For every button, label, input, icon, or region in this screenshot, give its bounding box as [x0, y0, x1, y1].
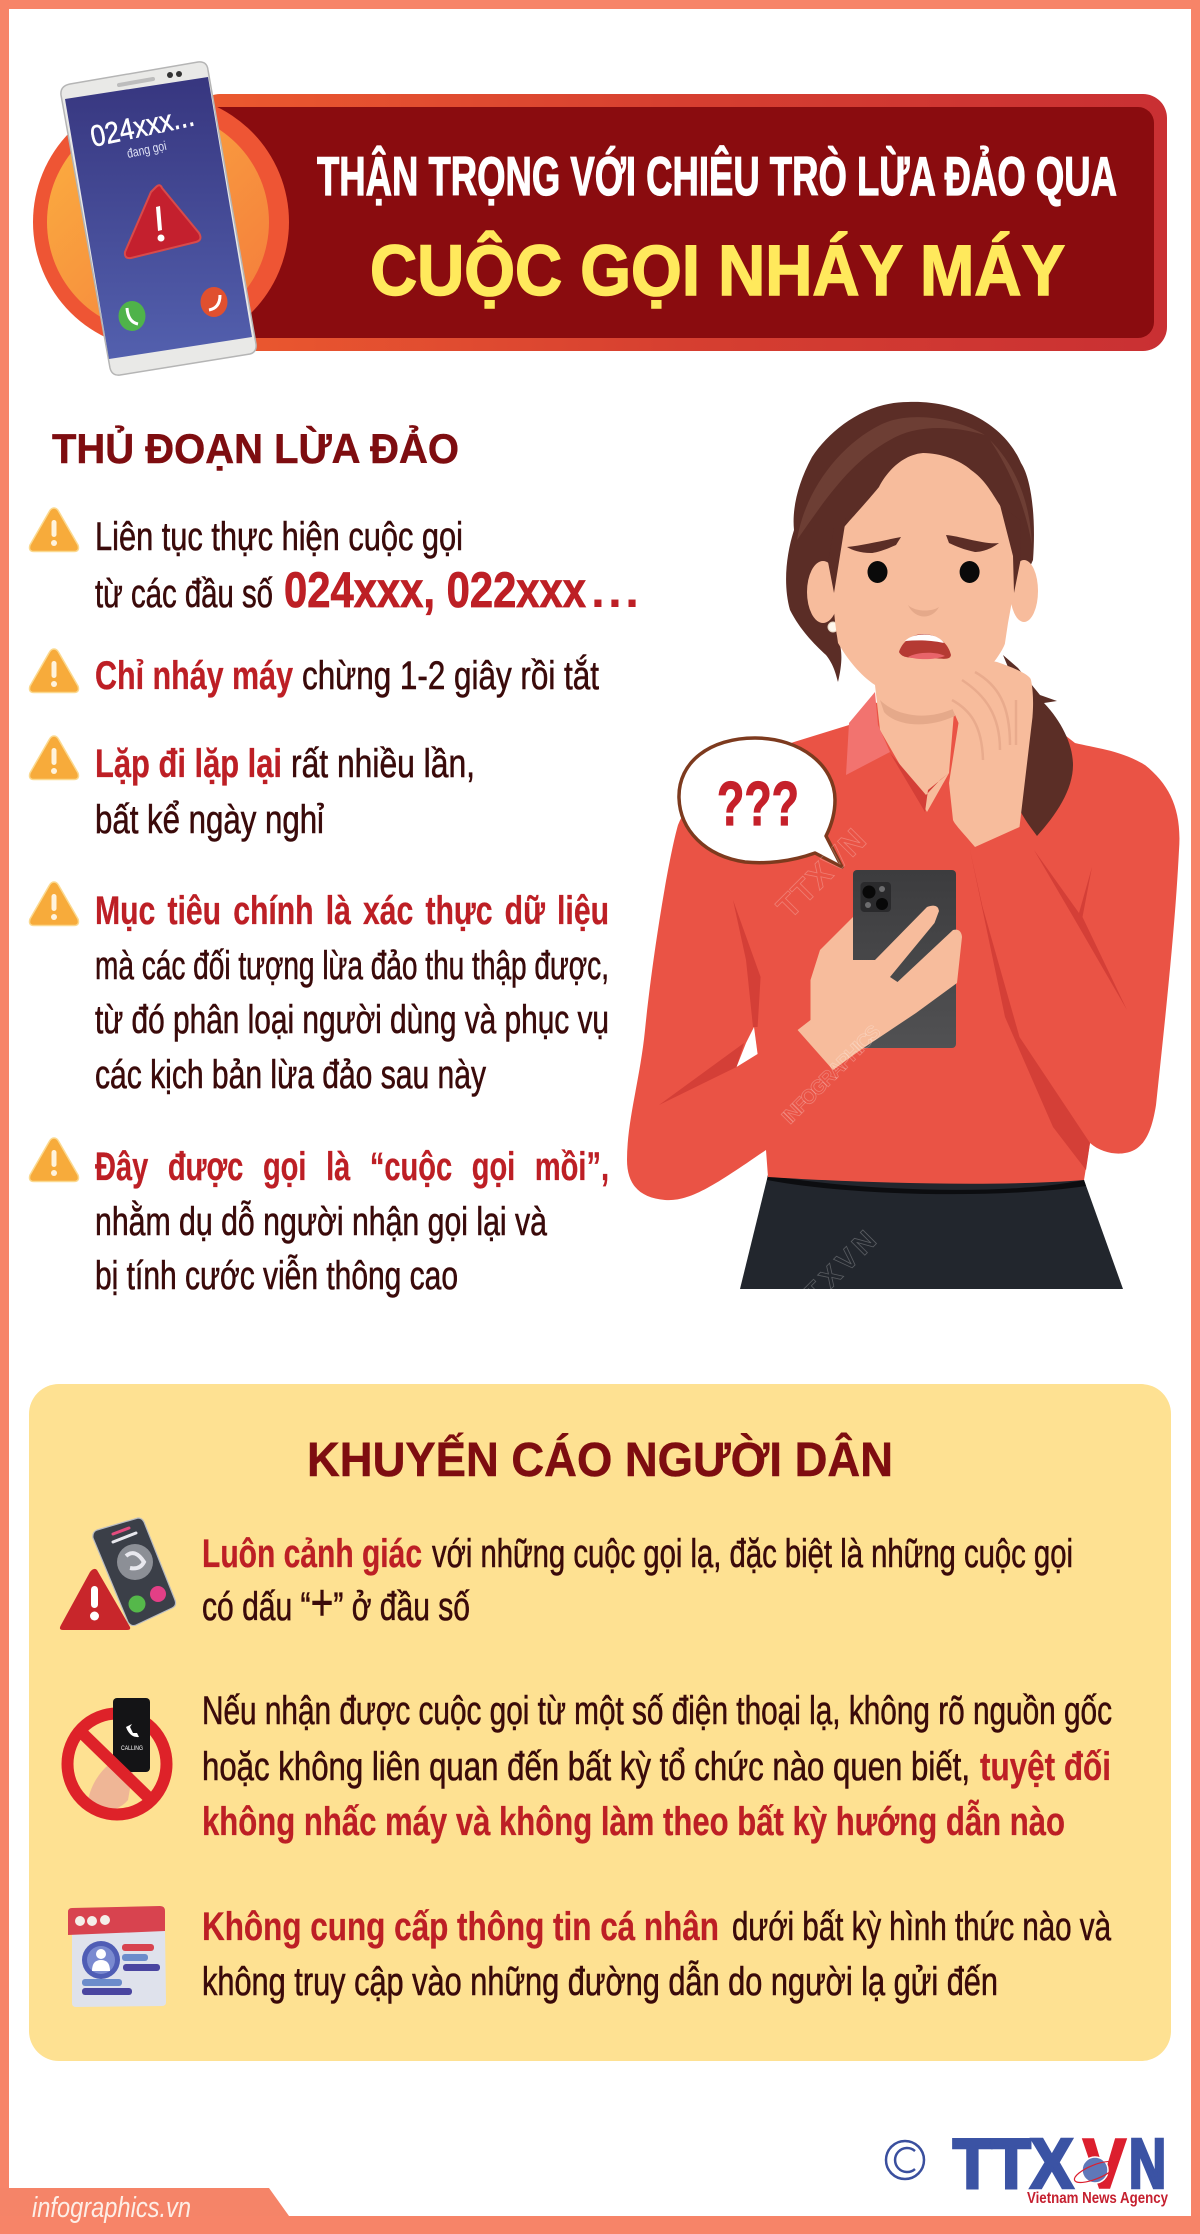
icon: warning	[30, 649, 78, 692]
sideburns	[828, 505, 1021, 593]
icon: phone and warning	[60, 1518, 176, 1630]
title banner	[33, 94, 1167, 351]
text: nhằm dụ dỗ người nhận gọi lại và	[95, 1199, 548, 1244]
wordmark: Vietnam News Agency	[1027, 2190, 1168, 2207]
shirt	[627, 700, 1179, 1200]
face	[833, 453, 1018, 705]
text: Đây được gọi là “cuộc gọi mồi”,	[95, 1145, 609, 1189]
watermarks: INFOGRAPHICS	[778, 1021, 885, 1129]
illustration: worried woman holding phone	[627, 402, 1179, 1324]
icon: answer button	[118, 301, 146, 331]
watermarks: TTXVN	[769, 822, 873, 925]
icon: personal info window	[68, 1906, 166, 2007]
text: Chỉ nháy máy	[95, 654, 294, 698]
item 2	[30, 649, 599, 698]
icon: warning	[30, 1138, 78, 1182]
text: Luôn cảnh giác	[202, 1532, 422, 1576]
item 1	[30, 508, 639, 618]
recommendation 2	[68, 1689, 1112, 1844]
hand on phone	[798, 906, 962, 1070]
text: từ các đầu số	[95, 572, 273, 616]
phone in hand	[853, 870, 956, 1048]
raised hand	[946, 662, 1033, 847]
text: có dấu “+” ở đầu số	[202, 1574, 470, 1632]
text: Mục tiêu chính là xác thực dữ liệu	[95, 889, 609, 933]
text: chừng 1-2 giây rồi tắt	[302, 653, 599, 698]
calling label: đang gọi	[126, 138, 168, 161]
icon: phone with warning	[61, 62, 256, 375]
ponytail	[1003, 655, 1073, 836]
text: bị tính cước viễn thông cao	[95, 1253, 458, 1298]
speech bubble	[679, 738, 842, 867]
icon: warning triangle	[125, 185, 200, 258]
logo: copyright and TTXVN	[886, 2124, 1168, 2207]
footer tab: infographics.vn	[0, 2188, 289, 2224]
text: Liên tục thực hiện cuộc gọi	[95, 515, 463, 559]
panel: recommendations	[29, 1384, 1171, 2061]
text	[202, 1689, 1112, 1844]
item 3	[30, 736, 475, 842]
text: Lặp đi lặp lại	[95, 742, 282, 786]
icon: warning	[30, 736, 78, 780]
hair	[786, 402, 1034, 682]
text	[202, 1532, 1073, 1632]
text	[95, 515, 639, 618]
recommendation 1	[60, 1518, 1073, 1632]
watermarks	[769, 822, 885, 1324]
item 5	[30, 1138, 609, 1298]
text	[95, 889, 609, 1097]
icon: orange circle behind phone	[33, 94, 289, 350]
footer tab: infographics.vn: infographics.vn	[32, 2192, 191, 2224]
heading: THỦ ĐOẠN LỪA ĐẢO: THỦ ĐOẠN LỪA ĐẢO	[52, 424, 459, 472]
wordmark: TTX	[953, 2124, 1073, 2202]
heading: KHUYẾN CÁO NGƯỜI DÂN	[307, 1432, 893, 1487]
wordmark	[953, 2124, 1168, 2207]
question marks: ???	[717, 770, 799, 839]
text	[202, 1905, 1112, 2004]
text: từ đó phân loại người dùng và phục vụ	[95, 998, 609, 1042]
text: Không cung cấp thông tin cá nhân	[202, 1905, 719, 1949]
collar	[846, 692, 955, 812]
watermarks: TTXVN	[782, 1225, 882, 1324]
caller number: 024xxx...	[88, 100, 197, 154]
neck	[875, 685, 955, 812]
text: ...	[591, 562, 639, 618]
recommendation 3	[68, 1905, 1112, 2007]
icon: no calling: CALLING	[121, 1746, 143, 1752]
wordmark: N	[1129, 2124, 1166, 2202]
text: các kịch bản lừa đảo sau này	[95, 1053, 486, 1097]
wordmark: V	[1083, 2124, 1126, 2202]
item 4	[30, 882, 609, 1097]
skirt	[740, 1175, 1123, 1289]
text: 024xxx, 022xxx	[284, 562, 586, 618]
text: tuyệt đối	[980, 1745, 1111, 1789]
icon: warning	[30, 882, 78, 926]
text: hoặc không liên quan đến bất kỳ tổ chức nào quen biết,	[202, 1745, 970, 1789]
text: bất kể ngày nghỉ	[95, 798, 324, 842]
copyright mark	[886, 2141, 924, 2179]
icon: decline button	[200, 287, 228, 317]
ears	[807, 560, 1038, 632]
text: mà các đối tượng lừa đảo thu thập được,	[95, 944, 609, 988]
icon: no calling	[68, 1698, 166, 1814]
text: rất nhiều lần,	[291, 742, 475, 786]
text	[95, 653, 599, 698]
facial features	[847, 535, 999, 659]
text	[95, 742, 475, 842]
icon: warning	[30, 508, 78, 552]
text	[95, 1145, 609, 1298]
title line 2: CUỘC GỌI NHÁY MÁY	[370, 231, 1065, 311]
